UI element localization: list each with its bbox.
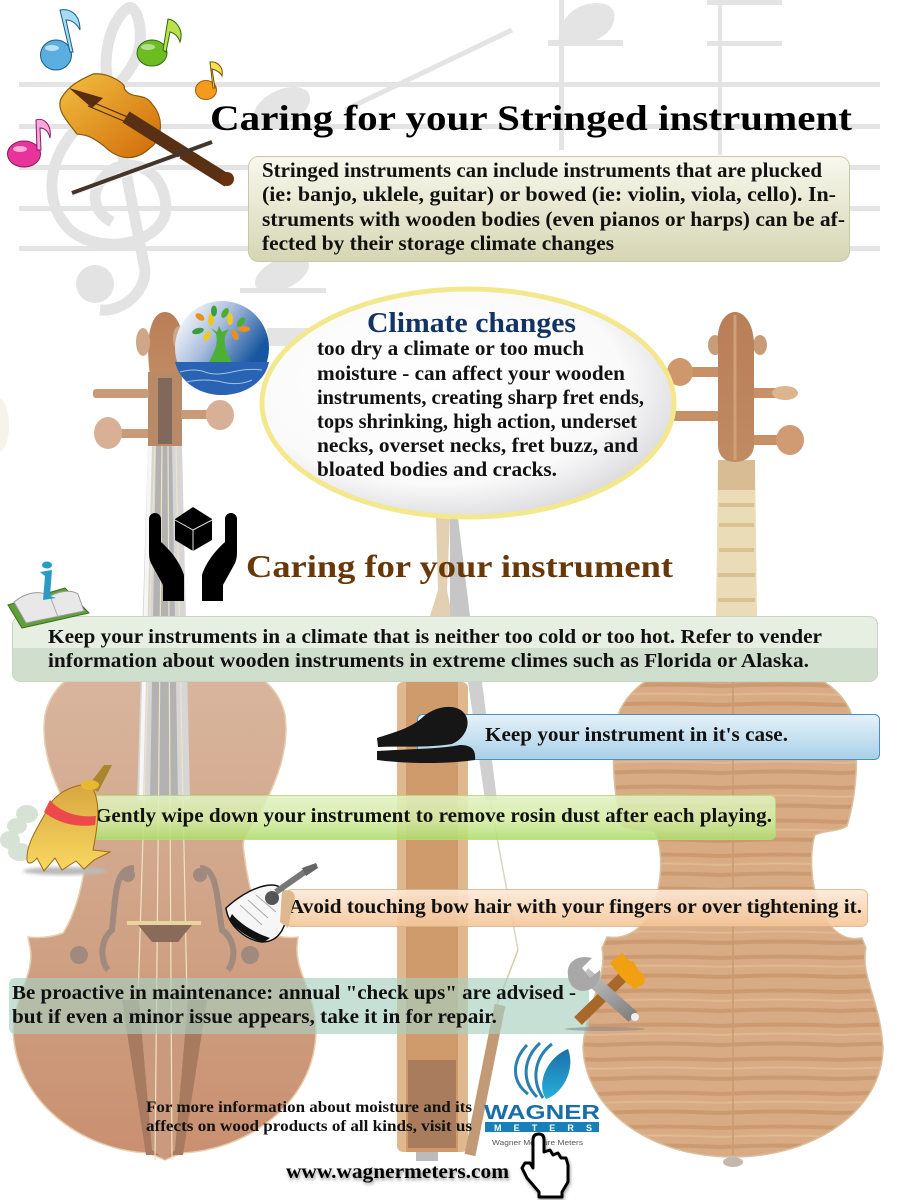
text: climate body: necks, overset necks, fret buzz, and [317, 433, 638, 457]
text: climate body: bloated bodies and cracks. [317, 457, 557, 481]
icon: broom [0, 765, 112, 875]
panel: proactive maintenance: but if even a minor issue appears, take it in for repair. [12, 1006, 497, 1028]
link: website: www.wagnermeters.com [286, 1161, 509, 1183]
panel: keep in case: Keep your instrument in it's case. [485, 724, 788, 746]
panel: climate advice: Keep your instruments in a climate that is neither too cold or too hot. Refer to vender [48, 626, 822, 648]
panel: introduction [248, 156, 850, 262]
logo: Wagner Meters [484, 1043, 601, 1147]
icon: wrench and hammer [565, 953, 645, 1031]
panel: introduction: (ie: banjo, uklele, guitar) or bowed (ie: violin, viola, cello). In- [262, 182, 836, 206]
text: more information: For more information about moisture and its [146, 1099, 472, 1116]
icon: hand cursor [522, 1134, 568, 1197]
icon: blue music note [40, 10, 80, 70]
panel: climate advice [12, 616, 878, 682]
heading: caring for your instrument: Caring for your instrument [246, 548, 673, 584]
text: climate body: tops shrinking, high action, underset [317, 409, 637, 433]
panel: climate changes oval [262, 289, 674, 517]
icon: violin and bow [60, 74, 234, 196]
panel: proactive maintenance [9, 978, 589, 1034]
icon: tree and water globe [175, 301, 269, 395]
panel: wipe down: Gently wipe down your instrument to remove rosin dust after each playing. [95, 805, 772, 827]
title: Caring for your Stringed instrument [210, 98, 852, 138]
background: music staff and notes [19, 0, 880, 346]
text: climate body [317, 336, 644, 481]
panel: introduction: struments with wooden bodies (even pianos or harps) can be af- [262, 207, 845, 231]
icon: acoustic guitar [226, 863, 318, 942]
panel: climate advice: information about wooden instruments in extreme climes such as Florida or Alaska. [48, 650, 809, 672]
logo: Wagner Meters: Wagner Moisture Meters [492, 1140, 584, 1147]
icon: pink music note [8, 119, 50, 167]
panel: introduction: Stringed instruments can include instruments that are plucked [262, 158, 822, 182]
text: more information: affects on wood products of all kinds, visit us [146, 1118, 472, 1135]
panel: bow hair: Avoid touching bow hair with your fingers or over tightening it. [289, 896, 862, 918]
heading: climate changes: Climate changes [367, 308, 576, 339]
logo: Wagner Meters: WAGNER [484, 1102, 601, 1124]
panel: bow hair [286, 890, 868, 926]
icon: hands holding box [149, 507, 237, 601]
background: front view violin [0, 312, 316, 1160]
text: climate body: too dry a climate or too much [317, 336, 584, 360]
icon: green music note [137, 19, 181, 66]
panel: keep in case [418, 714, 880, 760]
logo: Wagner Meters: METERS [494, 1123, 592, 1133]
text: more information [146, 1099, 472, 1135]
icon: information book [8, 562, 89, 628]
background: side view violin [397, 518, 518, 1161]
panel: wipe down [92, 796, 776, 840]
panel: introduction: fected by their storage climate changes [262, 231, 614, 255]
panel: proactive maintenance: Be proactive in maintenance: annual "check ups" are advised - [12, 982, 576, 1004]
text: climate body: moisture - can affect your wooden [317, 361, 625, 385]
background: back view violin [583, 312, 883, 1167]
text: climate body: instruments, creating sharp fret ends, [317, 385, 644, 409]
icon: instrument case [377, 707, 475, 763]
icon: orange music note [196, 62, 222, 100]
